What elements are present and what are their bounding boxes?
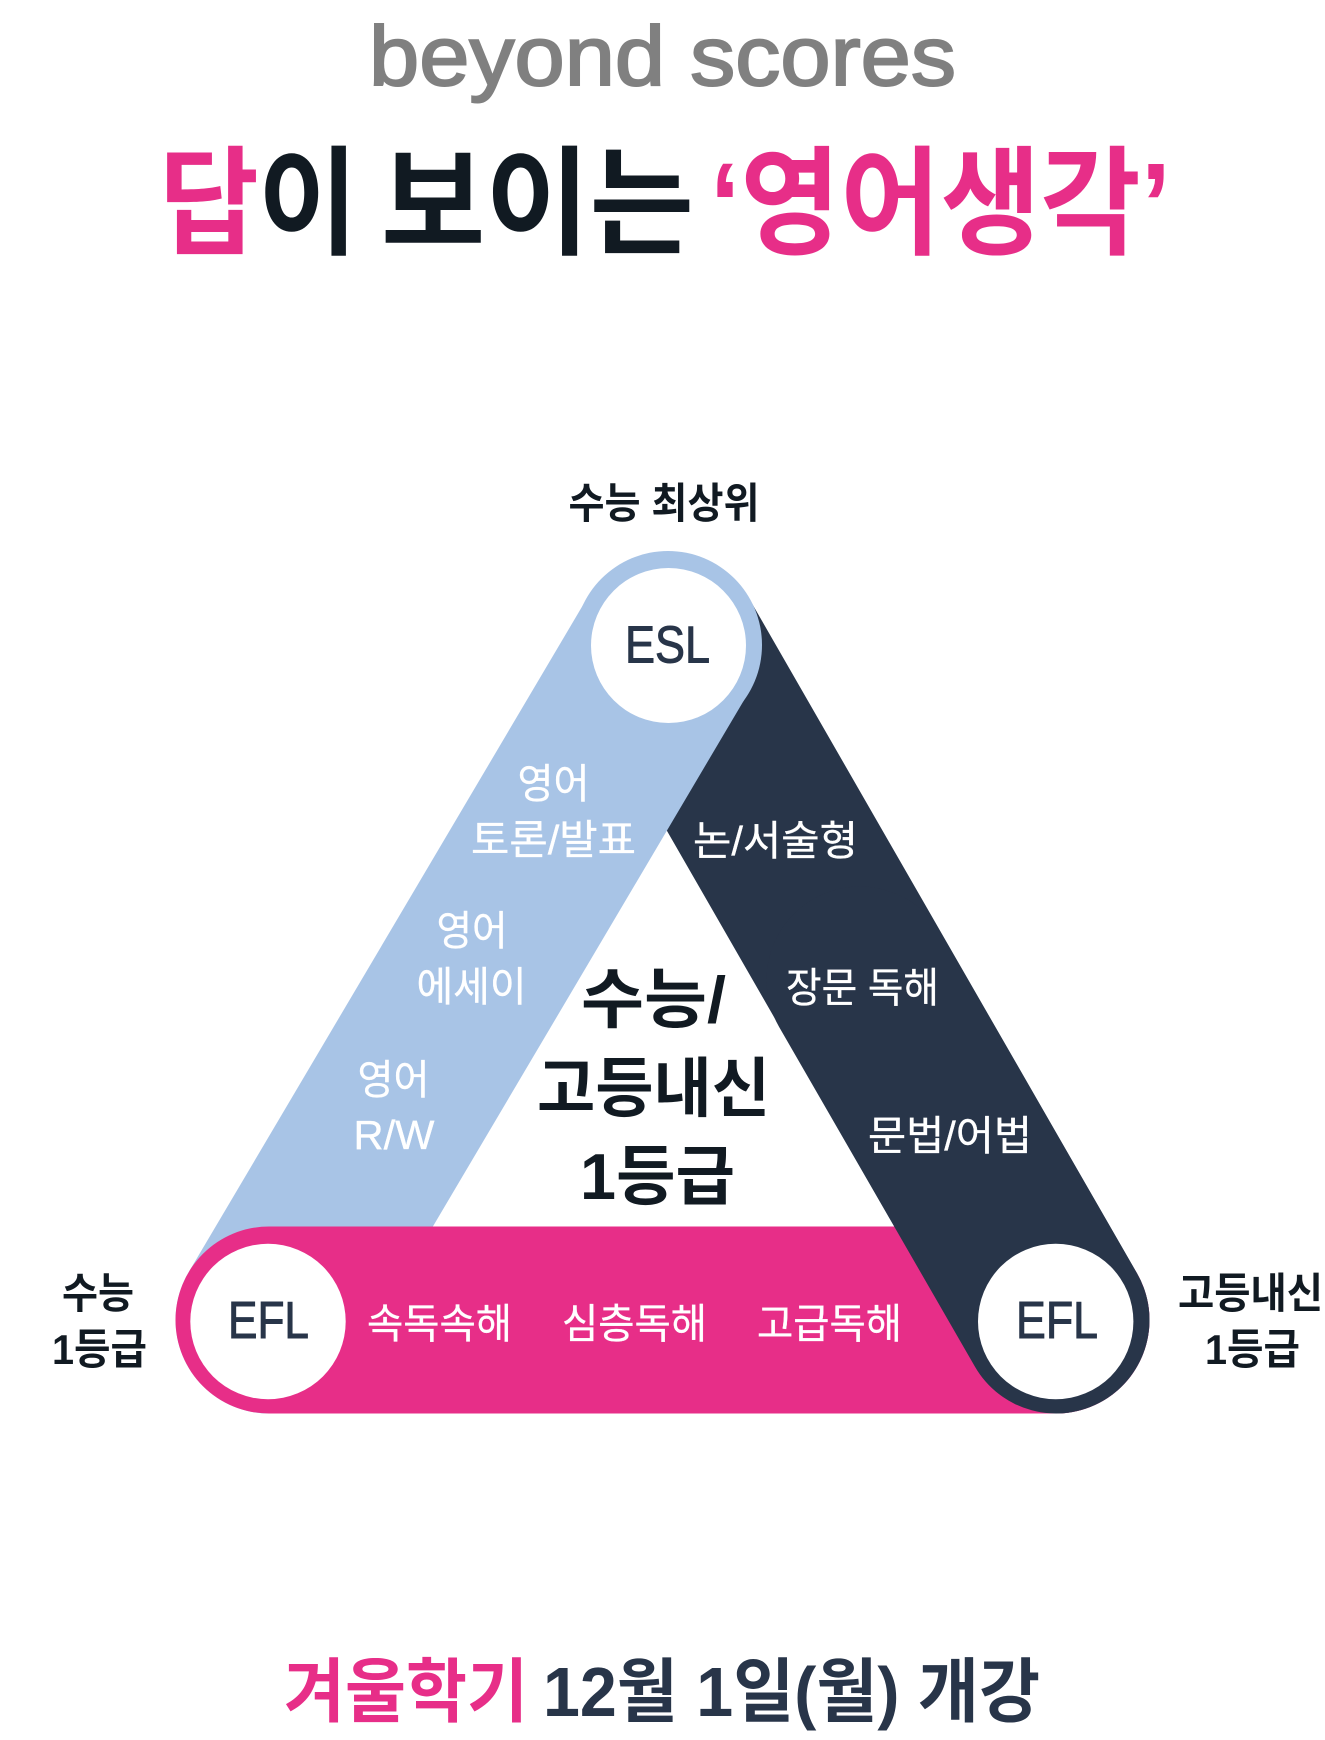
- title: 보이는: [381, 139, 694, 271]
- pink band labels: 속독속해: [367, 1301, 512, 1347]
- node: ESL circle: [591, 568, 746, 723]
- node: right EFL circle: EFL: [1016, 1292, 1098, 1350]
- label: left corner: 1등급: [52, 1326, 147, 1373]
- title: [159, 139, 1171, 271]
- dark band labels: [693, 818, 1032, 1159]
- label: left corner: [52, 1270, 147, 1373]
- center text: [537, 963, 770, 1213]
- node: ESL circle: ESL: [625, 616, 710, 674]
- dark band labels: 논/서술형: [693, 818, 858, 864]
- pink band labels: 고급독해: [757, 1301, 902, 1347]
- label: right corner: 1등급: [1205, 1326, 1300, 1373]
- blue band labels: [354, 761, 636, 1158]
- dark band labels: 장문 독해: [786, 965, 939, 1011]
- label: right corner: [1178, 1270, 1323, 1373]
- blue band labels: 에세이: [416, 964, 526, 1010]
- node: left EFL circle: EFL: [228, 1292, 309, 1350]
- blue band labels: 영어: [436, 908, 508, 954]
- footer: opening date: 12월 1일(월) 개강: [543, 1653, 1040, 1731]
- blue band labels: R/W: [354, 1112, 435, 1158]
- title: 답: [159, 139, 259, 271]
- center text: 고등내신: [537, 1052, 770, 1125]
- center text: 수능/: [581, 963, 726, 1036]
- blue band labels: 영어: [518, 761, 590, 807]
- blue cap at top: [574, 551, 762, 739]
- title: ‘영어생각’: [710, 139, 1171, 271]
- pink band labels: [367, 1301, 902, 1347]
- node: right EFL circle: [978, 1244, 1133, 1399]
- brand heading: beyond scores: beyond scores: [369, 9, 956, 103]
- footer: opening date: 겨울학기: [284, 1653, 528, 1731]
- blue band labels: 토론/발표: [471, 817, 636, 863]
- pink band labels: 심층독해: [562, 1301, 707, 1347]
- title: 이: [258, 139, 358, 271]
- band: pink bottom side: [269, 1226, 1056, 1414]
- dark band labels: 문법/어법: [868, 1113, 1032, 1159]
- band: dark overlap over pink: [860, 980, 1056, 1320]
- label: left corner: 수능: [62, 1270, 134, 1317]
- blue band labels: 영어: [358, 1057, 430, 1103]
- band: blue left side: [269, 645, 668, 1320]
- center text: 1등급: [580, 1140, 735, 1213]
- triangle diagram: [269, 551, 1056, 1320]
- node: left EFL circle: [190, 1244, 346, 1399]
- band: dark right side: [668, 645, 1056, 1320]
- label: top of triangle: 수능 최상위: [568, 480, 760, 527]
- footer: opening date: [284, 1653, 1040, 1731]
